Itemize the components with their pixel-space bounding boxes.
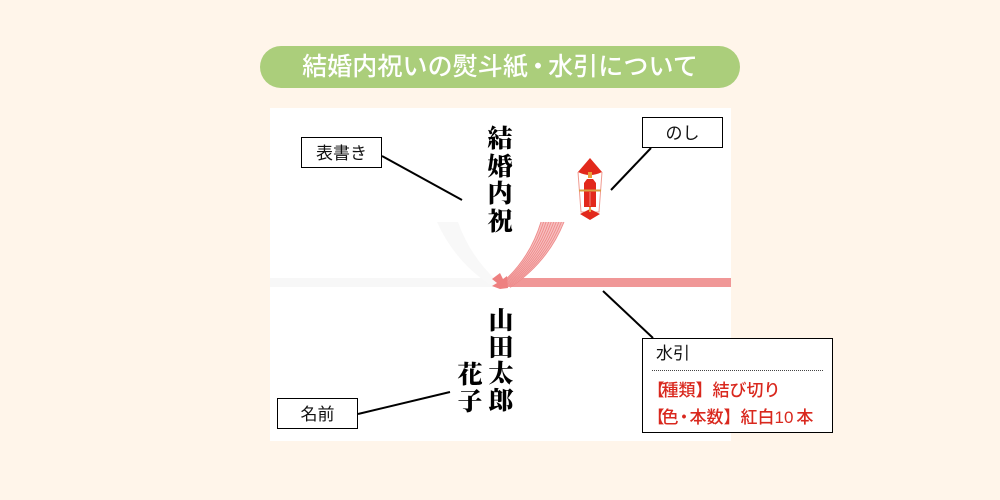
text block: omotegaki: 内: [487, 181, 512, 208]
panel: noshi paper: [270, 108, 731, 441]
text block: omotegaki: 祝: [487, 208, 512, 236]
callout details: 【種類】結び切り: [648, 381, 780, 400]
text block: family name: 田: [488, 334, 514, 362]
mizuhiki knot: [492, 273, 508, 289]
leader line: name: [358, 392, 450, 414]
label: noshi: [642, 117, 723, 148]
callout details: [648, 381, 813, 427]
text block: family name: 郎: [488, 388, 514, 414]
title: [260, 46, 740, 88]
leader line: mizuhiki: [603, 291, 653, 338]
title: 結婚内祝いの熨斗紙・水引について: [302, 53, 698, 81]
callout: mizuhiki: [642, 338, 833, 433]
callout details: 【色・本数】紅白10本: [648, 408, 813, 427]
text block: given name: [457, 362, 482, 416]
callout heading: 水引: [656, 344, 690, 363]
text block: given name: 花: [457, 362, 482, 389]
label: name: 名前: [300, 405, 334, 424]
text block: given name: 子: [457, 388, 482, 416]
text block: omotegaki: 婚: [487, 154, 512, 180]
text block: family name: 太: [488, 361, 514, 388]
callout divider: [652, 370, 823, 371]
white mizuhiki band: [270, 222, 496, 287]
leader line: noshi: [611, 148, 651, 190]
text block: omotegaki: [487, 125, 512, 236]
label: name: [277, 398, 358, 429]
text block: family name: [488, 308, 514, 414]
label: omotegaki: [301, 137, 382, 168]
icon: noshi ornament: [578, 158, 602, 220]
leader line: omotegaki: [382, 156, 462, 200]
text block: family name: 山: [488, 308, 514, 335]
red mizuhiki band: [503, 222, 731, 287]
text block: omotegaki: 結: [487, 126, 512, 153]
label: noshi: のし: [666, 124, 700, 143]
label: omotegaki: 表書き: [316, 144, 367, 163]
